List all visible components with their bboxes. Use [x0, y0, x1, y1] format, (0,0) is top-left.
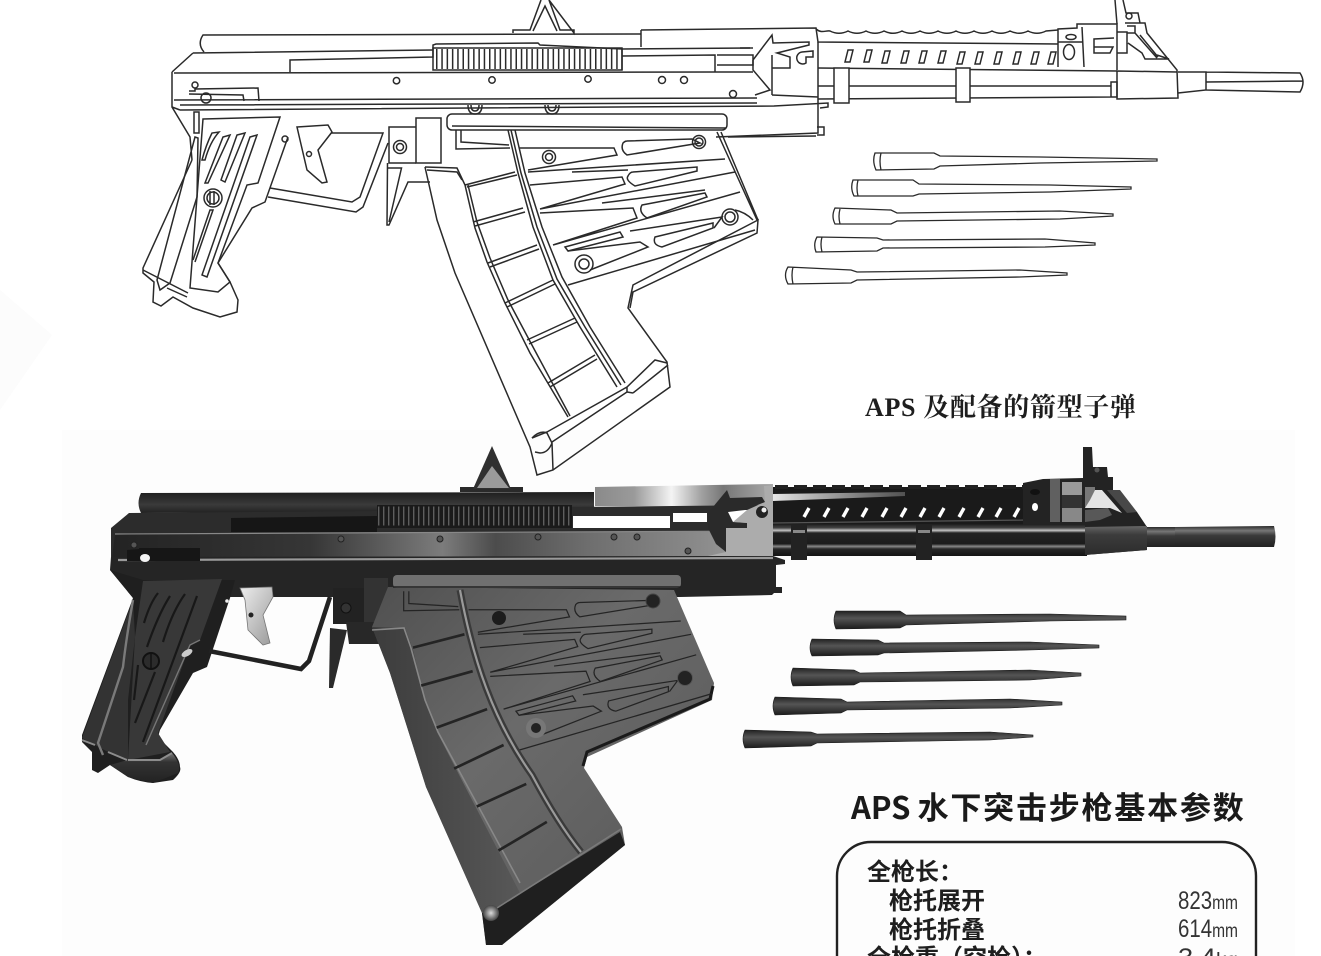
right receiver plate [708, 486, 773, 556]
stock folded row: 枪托折叠 [889, 916, 985, 944]
shaded bullet 3 [791, 668, 1081, 686]
magazine, outline [425, 130, 758, 475]
trigger guard, outline [268, 133, 388, 212]
charging grooves, outline [433, 48, 622, 70]
muzzle barrel [1147, 526, 1276, 547]
outline bullet 1 [874, 153, 1157, 170]
trigger guard [209, 597, 330, 669]
twin barrels [773, 524, 1087, 556]
receiver, outline [172, 28, 1058, 160]
pistol grip, outline [143, 112, 288, 317]
stock extended row: 枪托展开 [889, 887, 985, 915]
selector lever [708, 490, 765, 552]
outline bullet 2 [852, 180, 1131, 196]
barrel clamps [791, 525, 932, 560]
front sight triangle, shaded [460, 446, 523, 492]
shaded bullet 5 [743, 730, 1033, 748]
magazine spine, shaded [460, 590, 581, 852]
parameters panel [837, 842, 1256, 956]
stock folded row [889, 915, 1238, 944]
parameters heading: APS 水下突击步枪基本参数 [850, 783, 1246, 828]
ejection window [573, 510, 747, 528]
lower receiver band [112, 531, 773, 557]
muzzle barrel, outline [1178, 72, 1303, 93]
magazine rail, outline [447, 114, 727, 130]
shaded bullet 1 [834, 611, 1126, 629]
handguard slits [804, 508, 1019, 517]
trigger, outline [297, 125, 332, 183]
receiver hole [756, 506, 768, 518]
weight row [867, 938, 1238, 956]
arrow bullets, shaded [743, 611, 1126, 748]
pistol grip, shaded [82, 570, 235, 783]
stock extended row [889, 887, 1238, 915]
shaded gun illustration [82, 446, 1276, 945]
gas block lower [1085, 526, 1147, 555]
stock folded row: 614mm [1178, 915, 1238, 943]
stock latch, outline [189, 88, 259, 101]
charging handle grooves [377, 505, 572, 528]
magazine catch block [329, 578, 392, 688]
receiver body [111, 505, 773, 560]
gas block and rear sight, outline [1058, 0, 1178, 99]
handguard rail, outline [816, 29, 1058, 33]
magazine rivets, shaded [492, 594, 692, 738]
stock extended row: 823mm [1178, 887, 1238, 915]
overall length label: 全枪长： [867, 852, 963, 887]
magazine rail, shaded [393, 575, 681, 588]
stock latch [127, 548, 200, 562]
front sight triangle, outline [513, 0, 574, 33]
pins [131, 534, 691, 554]
magazine detail lines, shaded [404, 591, 712, 851]
handguard slots, outline [845, 50, 1056, 64]
trigger [240, 587, 273, 645]
outline bullet 5 [786, 267, 1067, 284]
gas block and rear sight [1023, 447, 1147, 555]
arrow bullets, outline [786, 153, 1157, 284]
magazine, shaded [372, 587, 714, 945]
line drawing gun [143, 0, 1303, 475]
receiver top cover [595, 484, 773, 506]
bullets caption: APS 及配备的箭型子弹 [865, 393, 1136, 422]
barrel tubes, outline [818, 68, 1117, 103]
outline bullet 4 [815, 237, 1095, 252]
pins, outline [192, 76, 736, 114]
dark side panel [231, 516, 377, 532]
shaded bullet 2 [810, 639, 1099, 656]
under receiver bar [110, 556, 785, 598]
stock tube, outline [200, 34, 641, 52]
shaded bullet 4 [773, 697, 1062, 715]
handguard [773, 487, 1031, 525]
outline bullet 3 [833, 208, 1113, 224]
folding stock tube [138, 492, 594, 513]
catch block, outline [387, 118, 441, 225]
